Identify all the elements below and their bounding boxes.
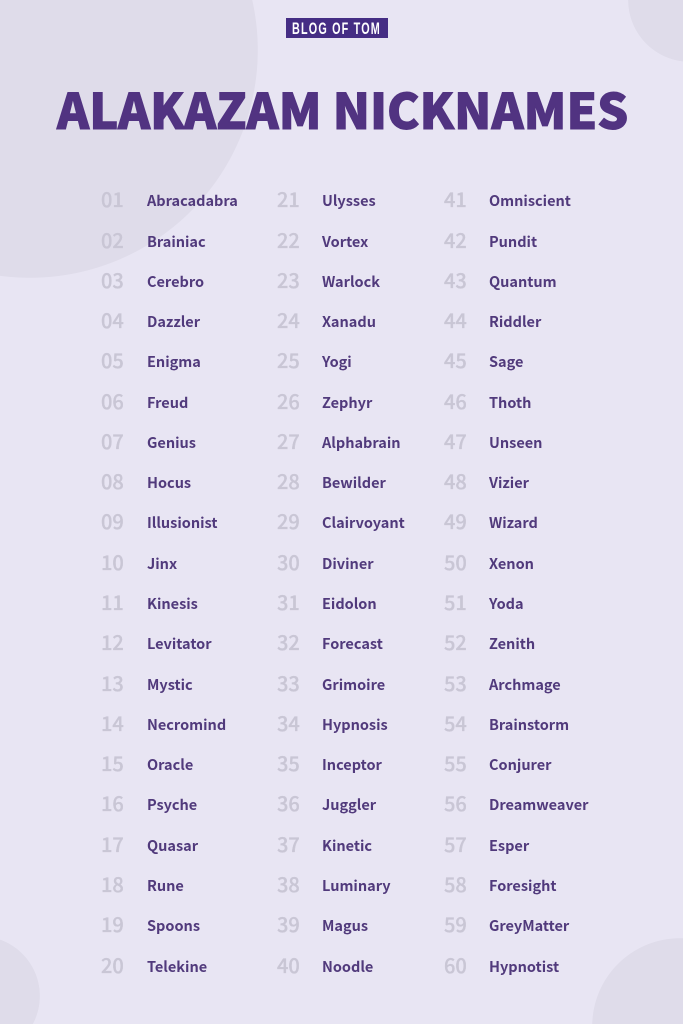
- column 1 list: Enigma: [147, 351, 201, 372]
- column 3 list: 50: [444, 547, 467, 576]
- column 1 list: Abracadabra: [147, 190, 238, 211]
- column 2 list: Kinetic: [322, 835, 372, 856]
- column 2 list: 30: [277, 547, 300, 576]
- column 2 list: Grimoire: [322, 674, 385, 695]
- column 2 list: Bewilder: [322, 472, 386, 493]
- column 1 list: 01: [101, 184, 124, 213]
- decorative circle top left: [0, 0, 258, 278]
- column 2 list: Eidolon: [322, 593, 377, 614]
- column 2 list: 34: [277, 708, 300, 737]
- column 2 list: Juggler: [322, 794, 376, 815]
- column 2 list: Zephyr: [322, 392, 372, 413]
- column 1 list: Illusionist: [147, 512, 217, 533]
- column 1 list: 11: [101, 587, 124, 616]
- column 1 list: Mystic: [147, 674, 193, 695]
- column 2 list: 25: [277, 345, 300, 374]
- column 3 list: 43: [444, 265, 467, 294]
- column 2 list: 39: [277, 909, 300, 938]
- column 2 list: Vortex: [322, 231, 368, 252]
- column 3 list: 46: [444, 386, 467, 415]
- column 3 list: 44: [444, 305, 467, 334]
- column 3 list: Conjurer: [489, 754, 551, 775]
- column 1 list: [101, 184, 238, 979]
- column 1 list: Levitator: [147, 633, 212, 654]
- column 1 list: Cerebro: [147, 271, 204, 292]
- column 3 list: 56: [444, 788, 467, 817]
- column 3 list: Hypnotist: [489, 956, 559, 977]
- column 3 list: Xenon: [489, 553, 534, 574]
- column 2 list: 26: [277, 386, 300, 415]
- column 3 list: 41: [444, 184, 467, 213]
- column 2 list: [277, 184, 405, 979]
- column 2 list: 28: [277, 466, 300, 495]
- column 3 list: 47: [444, 426, 467, 455]
- column 2 list: 27: [277, 426, 300, 455]
- column 2 list: Warlock: [322, 271, 380, 292]
- column 2 list: 24: [277, 305, 300, 334]
- column 3 list: Foresight: [489, 875, 556, 896]
- column 1 list: Rune: [147, 875, 184, 896]
- column 1 list: 15: [101, 748, 124, 777]
- column 2 list: Ulysses: [322, 190, 376, 211]
- column 2 list: Clairvoyant: [322, 512, 405, 533]
- column 1 list: Genius: [147, 432, 196, 453]
- column 3 list: Dreamweaver: [489, 794, 588, 815]
- column 2 list: Forecast: [322, 633, 383, 654]
- column 2 list: 21: [277, 184, 300, 213]
- column 1 list: Necromind: [147, 714, 226, 735]
- column 1 list: 17: [101, 829, 124, 858]
- column 1 list: 19: [101, 909, 124, 938]
- decorative circle bottom left: [0, 936, 40, 1024]
- column 2 list: Diviner: [322, 553, 374, 574]
- column 1 list: Spoons: [147, 915, 200, 936]
- column 1 list: Oracle: [147, 754, 193, 775]
- column 1 list: 08: [101, 466, 124, 495]
- column 1 list: 16: [101, 788, 124, 817]
- column 1 list: 10: [101, 547, 124, 576]
- column 1 list: 13: [101, 668, 124, 697]
- column 2 list: Yogi: [322, 351, 352, 372]
- column 3 list: Thoth: [489, 392, 531, 413]
- column 1 list: Telekine: [147, 956, 207, 977]
- column 3 list: Archmage: [489, 674, 561, 695]
- column 2 list: 29: [277, 506, 300, 535]
- column 3 list: Vizier: [489, 472, 529, 493]
- column 1 list: 12: [101, 627, 124, 656]
- column 2 list: 33: [277, 668, 300, 697]
- column 3 list: Pundit: [489, 231, 537, 252]
- column 3 list: 48: [444, 466, 467, 495]
- column 1 list: 03: [101, 265, 124, 294]
- column 1 list: Hocus: [147, 472, 191, 493]
- column 2 list: Magus: [322, 915, 368, 936]
- column 3 list: 57: [444, 829, 467, 858]
- column 3 list: Omniscient: [489, 190, 571, 211]
- column 1 list: 14: [101, 708, 124, 737]
- column 2 list: 37: [277, 829, 300, 858]
- column 2 list: Luminary: [322, 875, 391, 896]
- column 3 list: 59: [444, 909, 467, 938]
- column 3 list: Sage: [489, 351, 523, 372]
- decorative circle top right: [628, 0, 683, 62]
- column 2 list: Hypnosis: [322, 714, 388, 735]
- column 1 list: Dazzler: [147, 311, 200, 332]
- column 1 list: Jinx: [147, 553, 177, 574]
- column 1 list: 05: [101, 345, 124, 374]
- column 1 list: 06: [101, 386, 124, 415]
- column 3 list: Riddler: [489, 311, 541, 332]
- column 1 list: Freud: [147, 392, 188, 413]
- column 3 list: 51: [444, 587, 467, 616]
- column 3 list: Yoda: [489, 593, 524, 614]
- column 2 list: 38: [277, 869, 300, 898]
- column 3 list: Esper: [489, 835, 529, 856]
- column 3 list: 60: [444, 950, 467, 979]
- column 1 list: 18: [101, 869, 124, 898]
- column 2 list: Alphabrain: [322, 432, 401, 453]
- column 2 list: Noodle: [322, 956, 373, 977]
- column 1 list: 02: [101, 225, 124, 254]
- decorative circle bottom right: [592, 938, 683, 1024]
- column 3 list: 49: [444, 506, 467, 535]
- column 1 list: 20: [101, 950, 124, 979]
- column 3 list: Brainstorm: [489, 714, 569, 735]
- column 3 list: Quantum: [489, 271, 557, 292]
- column 2 list: 32: [277, 627, 300, 656]
- column 3 list: 42: [444, 225, 467, 254]
- column 3 list: 54: [444, 708, 467, 737]
- column 3 list: Zenith: [489, 633, 535, 654]
- logo badge: BLOG OF TOM: [292, 19, 381, 38]
- column 2 list: 36: [277, 788, 300, 817]
- column 3 list: 58: [444, 869, 467, 898]
- column 3 list: GreyMatter: [489, 915, 569, 936]
- column 1 list: 07: [101, 426, 124, 455]
- column 2 list: 22: [277, 225, 300, 254]
- column 2 list: 40: [277, 950, 300, 979]
- column 2 list: Inceptor: [322, 754, 382, 775]
- column 1 list: 04: [101, 305, 124, 334]
- column 2 list: 31: [277, 587, 300, 616]
- column 1 list: Psyche: [147, 794, 197, 815]
- column 3 list: 55: [444, 748, 467, 777]
- column 2 list: 23: [277, 265, 300, 294]
- column 3 list: Unseen: [489, 432, 542, 453]
- column 3 list: [444, 184, 588, 979]
- title: ALAKAZAM NICKNAMES: [57, 73, 628, 144]
- column 1 list: Brainiac: [147, 231, 206, 252]
- column 3 list: Wizard: [489, 512, 538, 533]
- column 3 list: 52: [444, 627, 467, 656]
- column 1 list: Quasar: [147, 835, 198, 856]
- column 1 list: 09: [101, 506, 124, 535]
- column 3 list: 53: [444, 668, 467, 697]
- column 2 list: Xanadu: [322, 311, 376, 332]
- column 3 list: 45: [444, 345, 467, 374]
- column 1 list: Kinesis: [147, 593, 198, 614]
- column 2 list: 35: [277, 748, 300, 777]
